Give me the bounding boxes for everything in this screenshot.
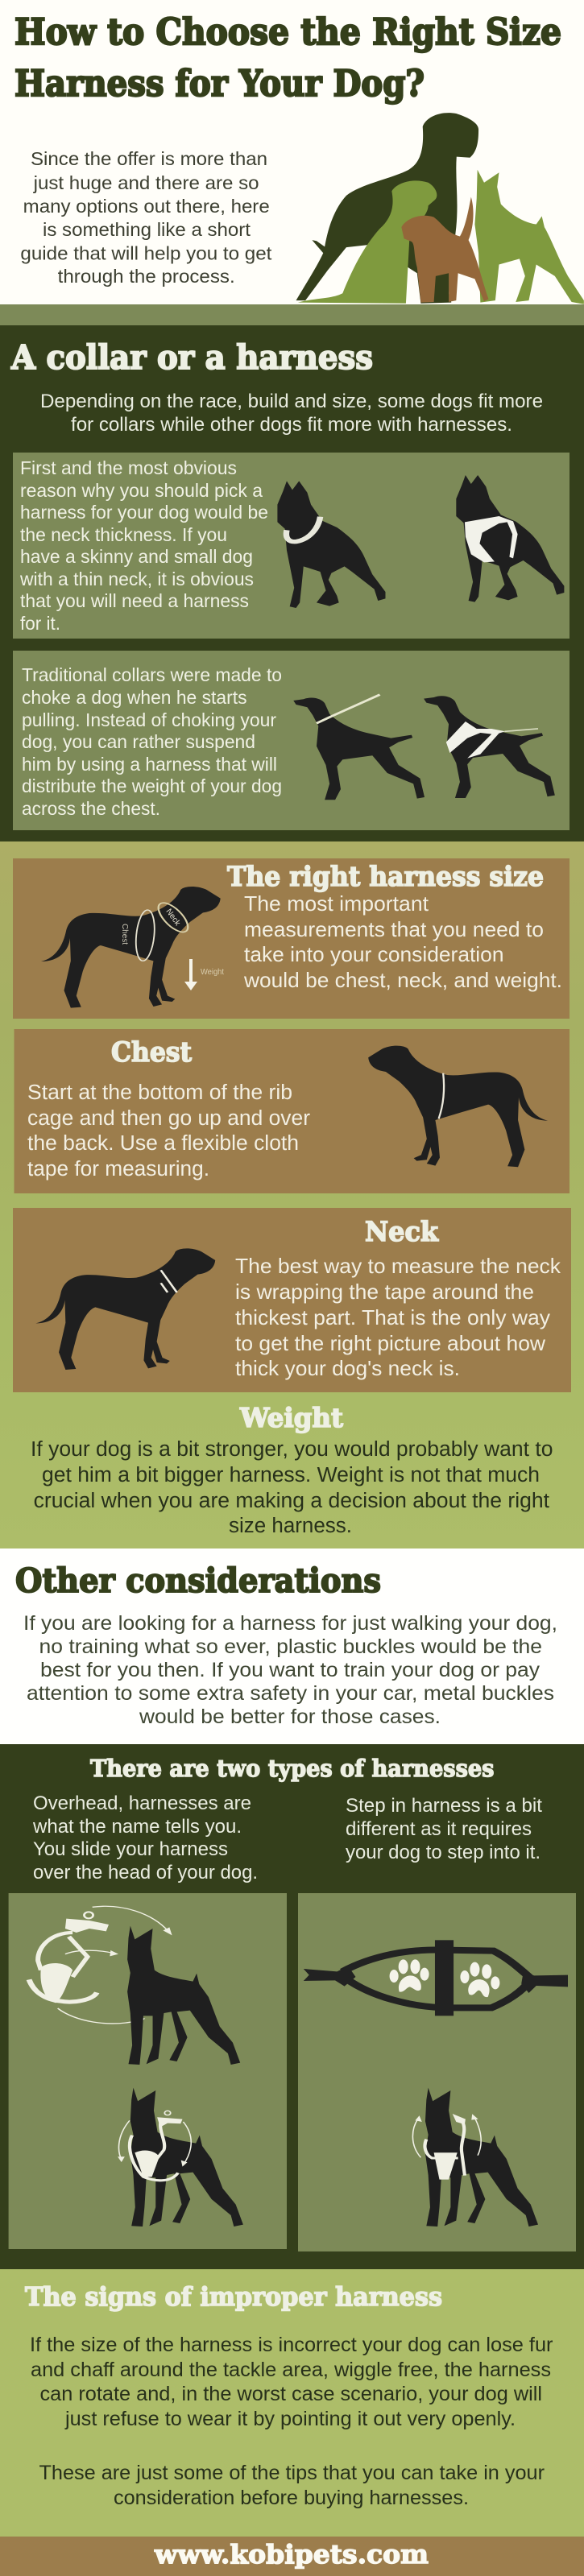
header band <box>0 304 584 325</box>
section intro text <box>40 391 543 436</box>
overhead harness text: what the name tells you. <box>32 1816 242 1838</box>
footer url: www.kobipets.com <box>154 2539 429 2570</box>
panel text: for it. <box>20 613 60 634</box>
panel: traditional collars <box>13 651 570 830</box>
panel text: Start at the bottom of the rib <box>27 1081 292 1104</box>
label: neck: Neck <box>164 908 182 928</box>
panel text: the neck thickness. If you <box>20 524 227 545</box>
panel text: harness for your dog would be <box>20 502 268 523</box>
panel: step in harness <box>298 1893 576 2251</box>
other considerations text: If you are looking for a harness for just walking your dog, <box>23 1612 557 1635</box>
panel text: pulling. Instead of choking your <box>22 709 276 730</box>
section background <box>0 1548 584 1744</box>
step in harness text: Step in harness is a bit <box>346 1795 542 1817</box>
other considerations text: best for you then. If you want to train your dog or pay <box>40 1659 541 1681</box>
other considerations text: would be better for those cases. <box>139 1706 441 1728</box>
icon: dog with neck tape <box>35 1248 215 1370</box>
icon: step in harness with paw prints <box>304 1940 568 2016</box>
panel text: choke a dog when he starts <box>22 687 246 708</box>
panel background <box>9 1893 287 2249</box>
icon: pointer dog on collar and leash <box>293 695 425 800</box>
heading: weight: Weight <box>239 1402 344 1433</box>
intro text <box>20 148 272 287</box>
panel text: is wrapping the tape around the <box>235 1280 534 1304</box>
panel background <box>13 651 570 830</box>
footer background <box>0 2537 584 2576</box>
intro text: through the process. <box>58 266 235 287</box>
label: weight: Weight <box>201 968 224 977</box>
panel text <box>235 1254 561 1380</box>
signs text <box>30 2334 553 2430</box>
closing text: These are just some of the tips that you can take in your <box>39 2462 545 2484</box>
section: signs of improper harness <box>0 2269 584 2537</box>
panel text: The most important <box>244 891 429 916</box>
section: two types of harnesses <box>0 1744 584 2269</box>
weight text: crucial when you are making a decision about the right <box>34 1490 549 1512</box>
panel: neck <box>13 1208 571 1392</box>
panel text: Traditional collars were made to <box>22 664 282 685</box>
icon: dog with collar <box>277 481 385 608</box>
panel text: dog, you can rather suspend <box>22 731 255 752</box>
panel text <box>22 664 282 819</box>
signs text: can rotate and, in the worst case scenario, your dog will <box>40 2383 542 2405</box>
weight text <box>31 1438 553 1537</box>
panel background <box>14 1029 570 1193</box>
title <box>14 10 561 105</box>
section background <box>0 2269 584 2537</box>
icon: dog with chest tape <box>368 1046 548 1167</box>
panel: the right harness size <box>13 858 570 1019</box>
step in harness text <box>346 1795 542 1863</box>
heading: the right harness size: The right harness size <box>227 861 544 893</box>
icon: paw print right <box>460 1962 499 1997</box>
step in harness text: your dog to step into it. <box>346 1842 541 1863</box>
panel background <box>13 858 570 1019</box>
icon: dog with chest and neck measurements <box>41 887 224 1008</box>
panel: chest <box>14 1029 570 1193</box>
intro text: is something like a short <box>43 219 251 240</box>
overhead harness text: You slide your harness <box>33 1838 228 1860</box>
panel text: the back. Use a flexible cloth <box>27 1132 299 1155</box>
icon: dog with chest harness <box>456 475 564 602</box>
panel text <box>27 1081 311 1180</box>
panel text <box>19 457 268 634</box>
panel text: The best way to measure the neck <box>235 1254 561 1278</box>
panel text: that you will need a harness <box>20 590 249 611</box>
icon: group of four dogs <box>296 113 584 304</box>
section background <box>0 1744 584 2269</box>
section: other considerations <box>0 1548 584 1744</box>
weight text: get him a bit bigger harness. Weight is not that much <box>42 1464 540 1486</box>
other considerations text: attention to some extra safety in your car, metal buckles <box>27 1682 554 1705</box>
overhead harness text: Overhead, harnesses are <box>33 1792 251 1814</box>
panel text: across the chest. <box>22 798 160 819</box>
title: Harness for Your Dog? <box>14 62 425 105</box>
intro text: just huge and there are so <box>33 172 259 193</box>
section: a collar or a harness <box>0 325 584 841</box>
other considerations text <box>23 1612 557 1728</box>
heading: the signs of improper harness: The signs of improper harness <box>25 2281 442 2312</box>
heading: other considerations: Other considerations <box>15 1561 381 1600</box>
panel: overhead harness <box>9 1893 287 2249</box>
weight text: If your dog is a bit stronger, you would probably want to <box>31 1438 553 1461</box>
panel background <box>298 1893 576 2251</box>
panel text: take into your consideration <box>244 942 504 966</box>
footer <box>0 2537 584 2576</box>
section background <box>0 325 584 841</box>
panel background <box>13 1208 571 1392</box>
heading: two types of harnesses: There are two types of harnesses <box>90 1755 495 1782</box>
icon: doberman wearing step in harness <box>412 2088 538 2227</box>
closing text <box>39 2462 545 2509</box>
step in harness text: different as it requires <box>346 1818 532 1840</box>
signs text: and chaff around the tackle area, wiggle free, the harness <box>31 2359 551 2381</box>
panel text: with a thin neck, it is obvious <box>19 569 254 589</box>
weight text: size harness. <box>229 1515 352 1537</box>
icon: doberman standing <box>127 1926 240 2065</box>
section intro text: for collars while other dogs fit more with harnesses. <box>71 414 512 436</box>
panel text: thickest part. That is the only way <box>235 1305 550 1329</box>
closing text: consideration before buying harnesses. <box>114 2487 469 2509</box>
section intro text: Depending on the race, build and size, some dogs fit more <box>40 391 543 412</box>
icon: weight arrow <box>184 959 197 990</box>
panel text: reason why you should pick a <box>20 480 263 501</box>
heading: a collar or a harness: A collar or a harness <box>10 338 373 377</box>
panel text: cage and then go up and over <box>27 1107 311 1130</box>
icon: paw print left <box>390 1959 429 1992</box>
panel text: tape for measuring. <box>27 1158 209 1180</box>
signs text: just refuse to wear it by pointing it out very openly. <box>64 2408 516 2430</box>
section: the right harness size <box>0 841 584 1548</box>
intro text: Since the offer is more than <box>31 148 267 169</box>
icon: pointer dog in harness <box>424 696 555 798</box>
icon: overhead harness with arrows <box>29 1906 172 2024</box>
header section background <box>0 0 584 304</box>
heading: neck: Neck <box>365 1216 439 1248</box>
intro text: many options out there, here <box>23 196 270 217</box>
panel text: thick your dog's neck is. <box>235 1356 460 1380</box>
panel text: distribute the weight of your dog <box>22 775 282 796</box>
other considerations text: no training what so ever, plastic buckles would be the <box>39 1635 542 1658</box>
section background <box>0 841 584 1548</box>
overhead harness text: over the head of your dog. <box>33 1862 258 1883</box>
icon: doberman wearing overhead harness <box>118 2088 243 2227</box>
label: chest: Chest <box>120 924 129 945</box>
signs text: If the size of the harness is incorrect your dog can lose fur <box>30 2334 553 2356</box>
panel text: have a skinny and small dog <box>20 546 253 567</box>
panel background <box>13 453 570 639</box>
panel text: First and the most obvious <box>20 457 237 478</box>
panel: neck thickness <box>13 453 570 639</box>
panel text: would be chest, neck, and weight. <box>243 968 562 992</box>
panel text <box>243 891 562 992</box>
panel text: to get the right picture about how <box>235 1331 545 1355</box>
panel text: him by using a harness that will <box>22 754 277 775</box>
heading: chest: Chest <box>111 1036 192 1069</box>
intro text: guide that will help you to get <box>20 243 272 264</box>
overhead harness text <box>32 1792 258 1883</box>
panel text: measurements that you need to <box>244 917 544 941</box>
